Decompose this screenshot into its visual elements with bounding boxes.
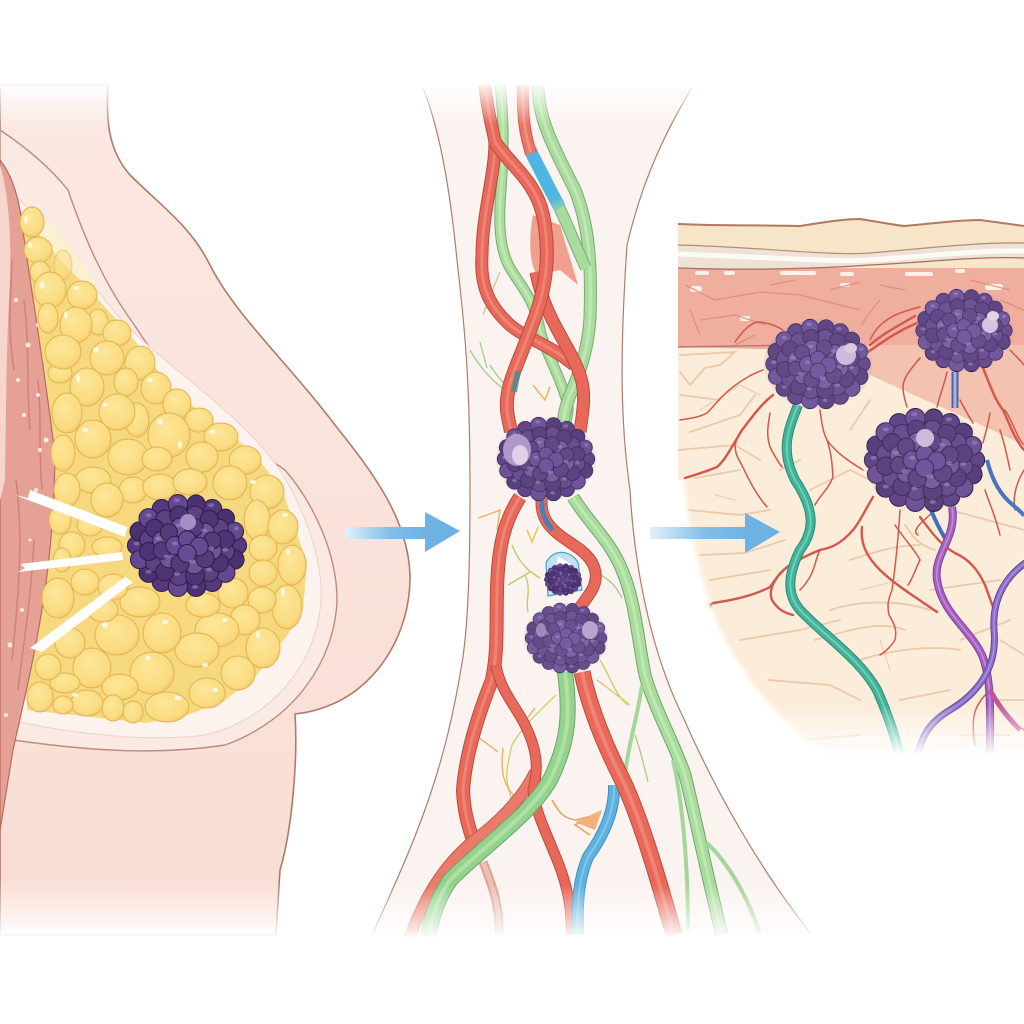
tissue tumor left: [764, 319, 872, 409]
red vessels: [410, 85, 584, 937]
tumor-bearing loop: [542, 497, 596, 610]
fat lobules: [20, 207, 306, 723]
primary tumor: [127, 495, 247, 596]
epidermis layer: [678, 219, 1024, 268]
bottom fade: [786, 707, 1024, 760]
red vessel right lower: [582, 672, 674, 935]
white invasion spikes: [15, 490, 133, 652]
green vessels upper: [500, 85, 760, 935]
lower right pink dermis: [850, 345, 1024, 445]
teal mark on vessel: [514, 371, 518, 392]
arrow: vessels to tissue: [650, 513, 780, 553]
tissue tumor center: [864, 409, 985, 511]
vessel channel background: [372, 88, 812, 935]
dermis texture: [685, 280, 1024, 345]
pale strip left of muscle: [0, 165, 10, 500]
dermis white flecks: [690, 269, 1003, 321]
green vessel lower: [428, 672, 568, 937]
inner breast lobe outline: [0, 130, 337, 751]
top and bottom fade: [0, 80, 300, 940]
panel: blood and lymph vessels: [360, 80, 830, 940]
panel: distant tissue metastasis: [678, 219, 1024, 800]
body silhouette: [0, 85, 410, 935]
pale yellow upper pocket: [25, 200, 100, 330]
red capillary network: [680, 307, 1024, 745]
orange accent near vessels: [575, 810, 602, 830]
blue vessel lower: [578, 785, 614, 935]
channel edges: [372, 88, 812, 935]
teal vessel: [787, 405, 900, 757]
skin layer lines: [678, 219, 1024, 347]
chest wall muscle: [0, 160, 55, 830]
small tumor in vessel bubble: [544, 552, 582, 596]
muscle droplets: [4, 298, 48, 717]
vessel tumor upper: [496, 417, 596, 501]
panel: breast cross-section: [0, 80, 410, 940]
fat highlights: [24, 216, 290, 700]
arrow: breast to vessels: [345, 512, 460, 552]
pale skin band: [678, 243, 1024, 269]
top and bottom fade: [360, 80, 830, 940]
fine nerves and capillaries: [470, 272, 648, 835]
fatty tissue layer: [678, 330, 1024, 760]
dermis layer: [678, 268, 1024, 350]
primary tumor highlight: [180, 514, 196, 530]
vessel tumor lower: [524, 603, 608, 673]
fat backing: [20, 210, 307, 723]
muscle texture: [10, 260, 42, 690]
red blot behind vessels: [530, 215, 578, 285]
blue vessel upper: [530, 150, 560, 208]
tissue tumor right: [915, 289, 1013, 372]
white inner lining of fat pocket: [18, 198, 321, 738]
purple and blue vessels: [917, 372, 1024, 757]
fat tissue crack lines: [678, 352, 1024, 740]
